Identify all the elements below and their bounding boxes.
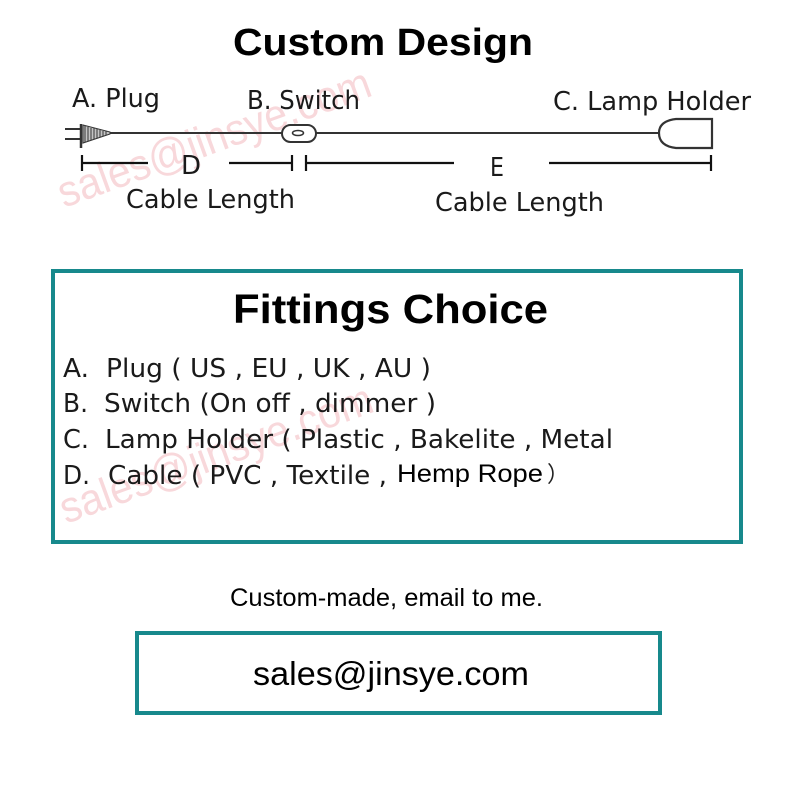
panel heading: Fittings Choice — [233, 286, 548, 332]
option: plug: Plug ( US , EU , UK , AU ) — [106, 354, 431, 384]
option: cable: Cable ( PVC , Textile , — [108, 461, 387, 491]
label: A. Plug: A. Plug — [72, 84, 160, 114]
cable line — [108, 132, 660, 134]
watermark: panel: sales@jinsye.com — [53, 374, 380, 533]
label: C. Lamp Holder: C. Lamp Holder — [553, 87, 751, 117]
option: cable: Hemp Rope — [397, 460, 543, 488]
label: D cable length: Cable Length — [126, 185, 295, 215]
label: D: D — [181, 151, 201, 181]
option: cable: D. — [63, 461, 90, 491]
panel: fittings choice — [53, 271, 741, 542]
option: plug: A. — [63, 354, 89, 384]
email box — [137, 633, 660, 713]
option: switch: Switch (On off , dimmer ) — [104, 389, 436, 419]
option: cable — [63, 460, 569, 491]
email address: sales@jinsye.com — [253, 655, 529, 692]
watermark: top: sales@jinsye.com — [51, 58, 378, 217]
icon: switch — [282, 125, 316, 142]
contact prompt: Custom-made, email to me. — [230, 584, 543, 612]
option: switch: B. — [63, 389, 88, 419]
title: Custom Design — [233, 22, 533, 64]
icon: lamp holder — [659, 119, 712, 148]
option: cable: ） — [547, 462, 569, 487]
dimension D — [82, 155, 292, 171]
icon: plug — [65, 124, 110, 148]
label: E: E — [490, 152, 504, 182]
label: B. Switch: B. Switch — [247, 86, 360, 116]
option: lamp holder: C. — [63, 425, 89, 455]
cable diagram — [65, 119, 712, 148]
label: E cable length: Cable Length — [435, 188, 604, 218]
option: lamp holder: Lamp Holder ( Plastic , Bakelite , Metal — [105, 425, 613, 455]
dimension E — [306, 155, 711, 171]
